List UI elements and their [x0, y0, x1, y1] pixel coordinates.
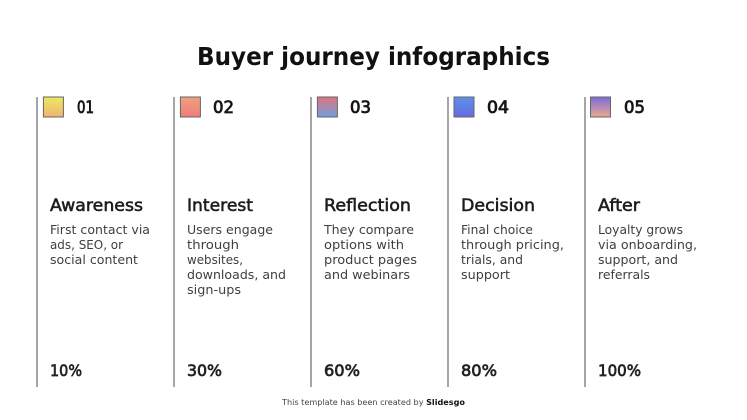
text: awareness description: ads, SEO, or	[50, 237, 124, 252]
text: reflection description: and webinars	[324, 267, 410, 282]
icon: yellow gradient square	[43, 97, 63, 117]
text: decision description	[461, 222, 564, 282]
number 01: 01	[77, 98, 94, 117]
percent 10: 10%	[50, 361, 82, 380]
text: reflection description: product pages	[324, 252, 417, 267]
heading: decision: Decision	[461, 196, 535, 215]
footer credit: This template has been created by Slidesgo	[281, 398, 466, 407]
percent 100: 100%	[598, 361, 641, 380]
text: reflection description: options with	[324, 237, 404, 252]
text: after description: via onboarding,	[598, 237, 697, 252]
percent 60: 60%	[324, 361, 360, 380]
title: Buyer journey infographics	[197, 42, 550, 71]
text: after description: support, and	[598, 252, 678, 267]
text: interest description: through	[187, 237, 239, 252]
percent 80: 80%	[461, 361, 497, 380]
icon: rose to blue gradient square	[317, 97, 337, 117]
text: reflection description	[323, 222, 417, 282]
text: decision description: through pricing,	[461, 237, 564, 252]
icon: violet to peach gradient square	[590, 97, 610, 117]
text: decision description: support	[461, 267, 510, 282]
text: after description	[598, 222, 697, 282]
panel: after	[585, 97, 697, 387]
number 05: 05	[624, 98, 645, 117]
number 03: 03	[350, 98, 371, 117]
heading: reflection: Reflection	[324, 196, 411, 215]
text: awareness description: social content	[50, 252, 138, 267]
text: interest description: downloads, and	[187, 267, 286, 282]
text: after description: referrals	[598, 267, 650, 282]
panel: decision	[448, 97, 564, 387]
heading: interest: Interest	[187, 196, 254, 215]
text: interest description	[187, 222, 286, 297]
panel: reflection	[311, 97, 417, 387]
text: decision description: Final choice	[461, 222, 533, 237]
text: interest description: websites,	[187, 252, 243, 267]
icon: blue gradient square	[454, 97, 474, 117]
text: decision description: trials, and	[461, 252, 523, 267]
number 04: 04	[487, 98, 509, 117]
percent 30: 30%	[187, 361, 222, 380]
heading: awareness: Awareness	[50, 196, 143, 215]
text: interest description: Users engage	[187, 222, 273, 237]
text: awareness description	[50, 222, 150, 267]
text: after description: Loyalty grows	[598, 222, 683, 237]
text: reflection description: They compare	[323, 222, 414, 237]
text: awareness description: First contact via	[50, 222, 150, 237]
panel: awareness	[37, 97, 150, 387]
number 02: 02	[213, 98, 234, 117]
panel: interest	[174, 97, 286, 387]
heading: after: After	[598, 196, 640, 215]
icon: coral gradient square	[180, 97, 200, 117]
text: interest description: sign-ups	[187, 282, 241, 297]
